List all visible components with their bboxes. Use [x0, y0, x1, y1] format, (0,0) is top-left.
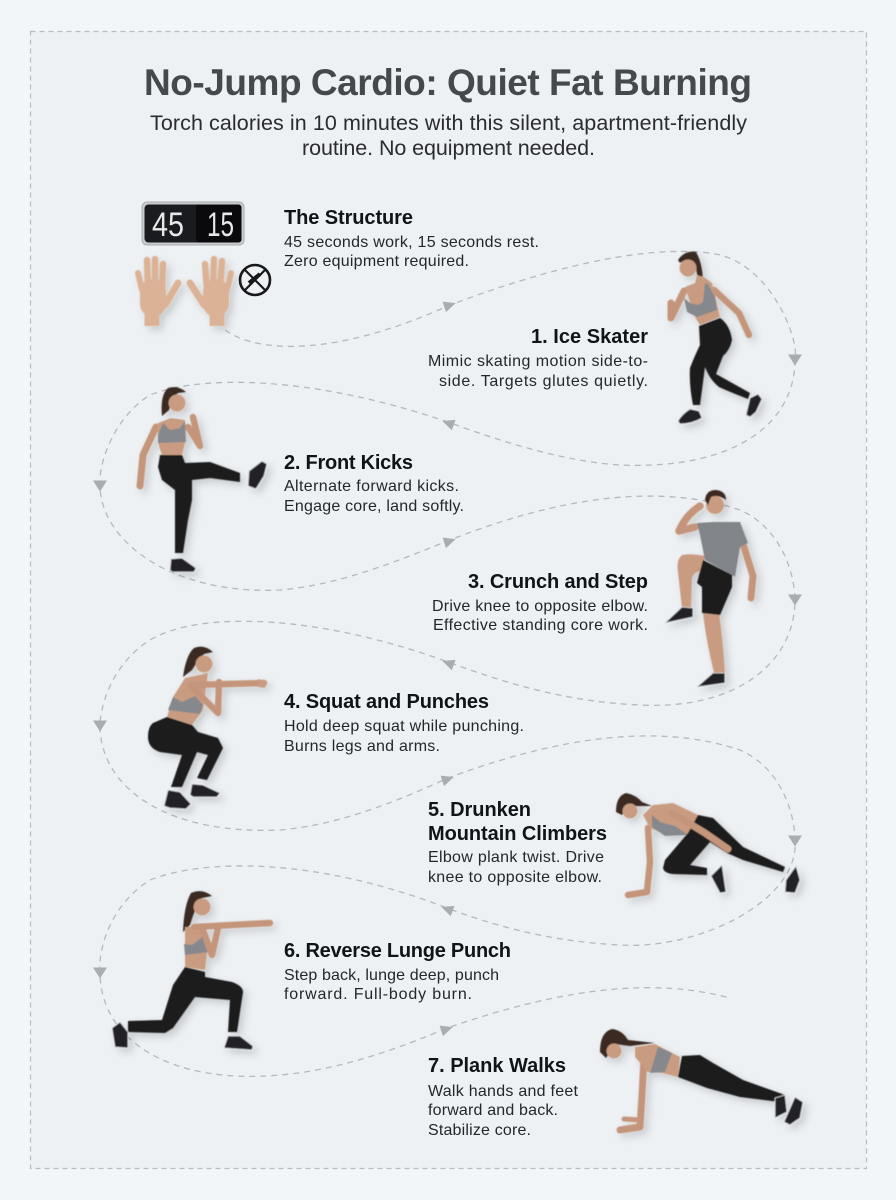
subtitle — [150, 111, 747, 160]
panel: 6 reverse lunge punch — [112, 891, 511, 1050]
text: mountain climbers description: Elbow plank twist. Drive — [428, 849, 604, 866]
figure: crunch and step — [665, 490, 753, 687]
text: crunch and step description — [432, 598, 648, 634]
text: structure description: Zero equipment required. — [284, 253, 469, 270]
text: plank walks description: Stabilize core. — [428, 1122, 531, 1139]
text: squat and punches description: Burns legs and arms. — [284, 738, 440, 755]
text: ice skater description: side. Targets glutes quietly. — [439, 373, 648, 390]
flow arrowheads — [93, 298, 802, 1036]
title: No-Jump Cardio: Quiet Fat Burning — [144, 62, 752, 103]
text: plank walks description — [428, 1083, 579, 1139]
text: crunch and step description: Drive knee to opposite elbow. — [432, 598, 648, 615]
text: ice skater description: Mimic skating motion side-to- — [428, 353, 648, 370]
text: reverse lunge description — [284, 967, 499, 1003]
figure: mountain climbers — [616, 793, 800, 895]
heading: the structure: The Structure — [284, 207, 413, 229]
icon: interval timer: 45 — [152, 206, 184, 244]
heading: squat and punches: 4. Squat and Punches — [284, 691, 489, 713]
text: crunch and step description: Effective standing core work. — [433, 617, 648, 634]
text: mountain climbers description: knee to opposite elbow. — [428, 869, 602, 886]
dashed connector path — [100, 251, 796, 1076]
panel: the structure — [138, 202, 539, 326]
panel: 2 front kicks — [140, 387, 464, 572]
text: front kicks description — [284, 478, 464, 515]
heading: reverse lunge punch: 6. Reverse Lunge Punch — [284, 940, 511, 962]
icon: no equipment — [240, 265, 270, 295]
text: front kicks description: Engage core, land softly. — [284, 498, 464, 515]
figure: front kicks — [140, 387, 267, 572]
text: structure description: 45 seconds work, 15 seconds rest. — [284, 234, 539, 251]
panel: 3 crunch and step — [432, 490, 753, 687]
heading: front kicks: 2. Front Kicks — [284, 452, 413, 474]
subtitle: Torch calories in 10 minutes with this silent, apartment-friendly — [150, 111, 747, 135]
panel: 7 plank walks — [428, 1029, 803, 1139]
text: squat and punches description — [284, 718, 524, 755]
heading: drunken mountain climbers: Mountain Climbers — [428, 823, 607, 845]
heading: plank walks: 7. Plank Walks — [428, 1055, 566, 1077]
text: ice skater description — [428, 353, 648, 390]
text: reverse lunge description: Step back, lunge deep, punch — [284, 967, 499, 984]
icon: interval timer — [142, 202, 244, 245]
subtitle: routine. No equipment needed. — [302, 136, 595, 160]
figure: squat and punches — [148, 647, 267, 809]
text: structure description — [284, 234, 539, 270]
text: plank walks description: Walk hands and feet — [428, 1083, 579, 1100]
figure: ice skater — [671, 252, 762, 424]
text: mountain climbers description — [428, 849, 604, 886]
heading: ice skater: 1. Ice Skater — [531, 326, 648, 348]
text: front kicks description: Alternate forward kicks. — [284, 478, 459, 495]
text: squat and punches description: Hold deep squat while punching. — [284, 718, 524, 735]
panel: 1 ice skater — [428, 252, 762, 424]
heading: drunken mountain climbers — [428, 799, 607, 845]
icon: right hand — [190, 259, 231, 326]
icon: left hand — [138, 259, 178, 326]
text: plank walks description: forward and back. — [428, 1102, 558, 1119]
heading: drunken mountain climbers: 5. Drunken — [428, 799, 531, 821]
icon: interval timer: 15 — [207, 206, 234, 244]
figure: plank walks — [600, 1029, 803, 1130]
panel: 4 squat and punches — [148, 647, 524, 809]
text: reverse lunge description: forward. Full-body burn. — [284, 986, 472, 1003]
panel: 5 drunken mountain climbers — [428, 793, 800, 895]
figure: reverse lunge punch — [112, 891, 270, 1050]
heading: crunch and step: 3. Crunch and Step — [468, 571, 648, 593]
